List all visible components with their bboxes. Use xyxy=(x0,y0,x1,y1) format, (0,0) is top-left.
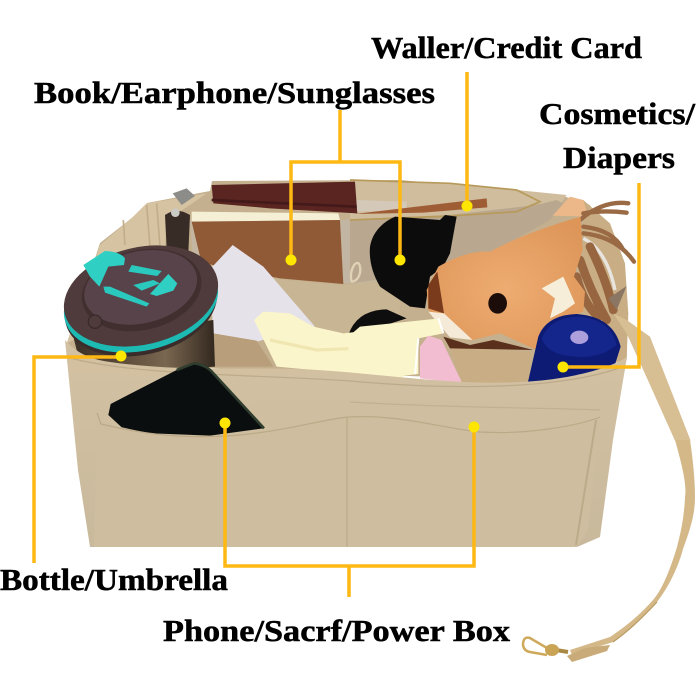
pink bottle xyxy=(420,336,462,383)
wallet and brown card holder xyxy=(212,182,487,214)
book xyxy=(192,212,343,284)
callout lines: book, earphone, sunglasses xyxy=(286,110,406,266)
label: wallet: Waller/Credit Card xyxy=(371,30,642,65)
bottle lid xyxy=(54,231,228,371)
label: diapers: Diapers xyxy=(563,140,675,175)
sunglasses xyxy=(348,215,457,335)
felt compartment walls xyxy=(213,333,532,383)
label: cosmetics: Cosmetics/ xyxy=(539,96,695,131)
blue cosmetic bottle xyxy=(528,314,621,383)
plush horse xyxy=(427,197,634,350)
label: book: Book/Earphone/Sunglasses xyxy=(34,75,435,110)
inner felt divider xyxy=(202,263,400,333)
bag right side wall xyxy=(583,200,628,370)
wrist strap with clasp xyxy=(523,313,695,662)
callout lines: cosmetics xyxy=(558,183,639,372)
callout lines: wallet xyxy=(462,72,472,212)
bag front panel xyxy=(65,340,627,547)
cloth xyxy=(254,312,443,378)
callout lines: phone, scarf, power box xyxy=(220,418,480,597)
phone xyxy=(108,363,264,436)
label: bottle: Bottle/Umbrella xyxy=(0,562,229,597)
callout lines: bottle xyxy=(34,350,126,563)
zipper pull xyxy=(165,188,195,253)
bag back wall and interior xyxy=(67,180,627,380)
label: phone: Phone/Sacrf/Power Box xyxy=(163,613,511,648)
front pocket xyxy=(94,413,600,547)
steel bottle xyxy=(73,320,215,372)
tissue xyxy=(209,245,315,342)
